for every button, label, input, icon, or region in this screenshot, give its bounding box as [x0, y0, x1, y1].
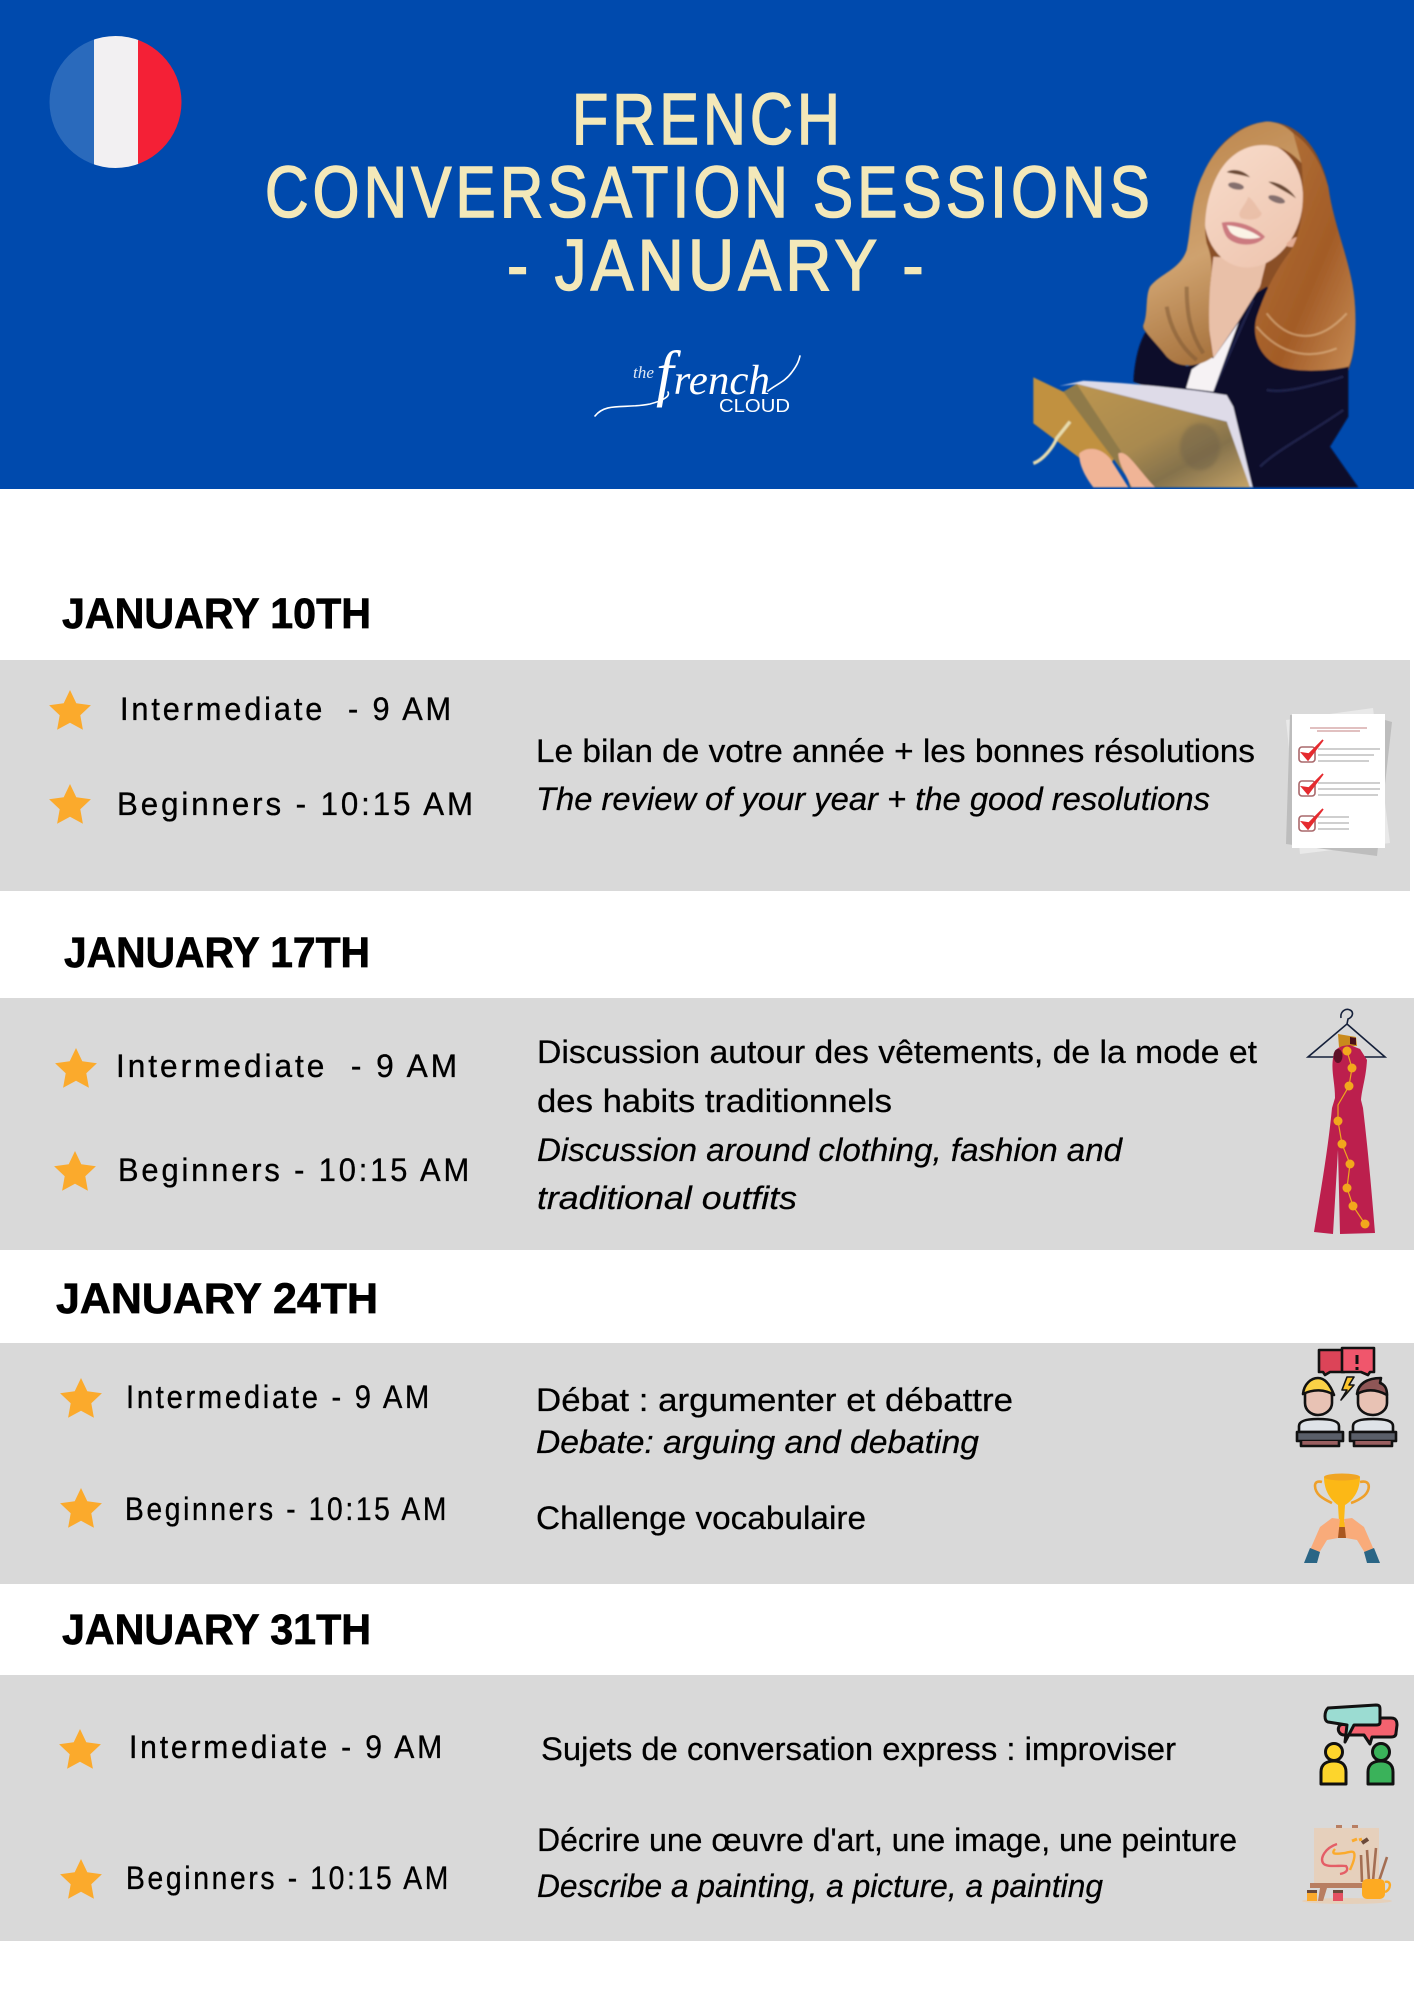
topic text: Discussion around clothing, fashion and	[537, 1132, 1123, 1168]
title: CONVERSATION SESSIONS	[265, 153, 1154, 233]
topic text: Discussion autour des vêtements, de la mode et	[537, 1034, 1257, 1070]
topic text	[536, 733, 1255, 817]
shirt	[1186, 322, 1239, 392]
icon: star	[59, 1729, 101, 1769]
notebook	[1033, 377, 1253, 487]
panel: January 10th session	[0, 660, 1410, 891]
hair back	[1143, 122, 1355, 370]
schedule: intermediate: Intermediate - 9 AM	[129, 1729, 445, 1765]
icon: star	[60, 1378, 102, 1418]
hair front left	[1143, 122, 1302, 365]
icon: two people talking	[1321, 1705, 1397, 1784]
schedule: intermediate: Intermediate - 9 AM	[126, 1379, 432, 1415]
icon: star	[55, 1048, 97, 1088]
date heading: January 10th: JANUARY 10TH	[62, 590, 371, 638]
topic text	[536, 1382, 1013, 1536]
icon: hands holding a trophy	[1304, 1474, 1380, 1563]
topic text: Describe a painting, a picture, a painting	[537, 1868, 1103, 1904]
schedule: intermediate: Intermediate - 9 AM	[120, 691, 454, 727]
title: - JANUARY -	[507, 226, 928, 306]
icon: star	[54, 1151, 96, 1191]
date heading: January 17th: JANUARY 17TH	[64, 929, 370, 977]
icon: two people debating	[1297, 1348, 1396, 1446]
topic text	[537, 1731, 1237, 1904]
logo: the french cloud: french	[656, 340, 770, 408]
schedule: beginners: Beginners - 10:15 AM	[118, 1152, 472, 1188]
topic text: Débat : argumenter et débattre	[536, 1382, 1013, 1418]
photo: smiling woman holding a gold notebook	[1033, 122, 1358, 487]
topic text: traditional outfits	[537, 1180, 797, 1216]
topic text: Debate: arguing and debating	[536, 1424, 979, 1460]
logo: the french cloud: CLOUD	[719, 396, 790, 416]
schedule: beginners: Beginners - 10:15 AM	[125, 1491, 449, 1527]
panel: January 17th session	[0, 998, 1414, 1250]
neck	[1207, 257, 1267, 358]
title	[265, 80, 1154, 306]
hand	[1079, 449, 1155, 487]
topic text: des habits traditionnels	[537, 1083, 892, 1119]
icon: star	[49, 690, 91, 730]
topic text: The review of your year + the good resolutions	[536, 781, 1210, 817]
topic text: Sujets de conversation express : improviser	[541, 1731, 1176, 1767]
title: FRENCH	[572, 80, 844, 160]
logo: the french cloud	[595, 340, 800, 416]
header banner	[0, 0, 1414, 489]
icon: star	[49, 784, 91, 824]
schedule: intermediate: Intermediate - 9 AM	[116, 1048, 460, 1084]
panel: January 31st session	[0, 1675, 1414, 1941]
topic text: Challenge vocabulaire	[536, 1500, 866, 1536]
icon: star	[60, 1859, 102, 1899]
logo: the french cloud: the	[633, 363, 654, 382]
topic text: Le bilan de votre année + les bonnes résolutions	[536, 733, 1255, 769]
topic text	[537, 1034, 1257, 1216]
jacket	[1133, 287, 1358, 487]
icon: checklist	[1286, 708, 1392, 856]
schedule: beginners: Beginners - 10:15 AM	[117, 786, 476, 822]
icon: easel with painting and brushes	[1302, 1825, 1392, 1904]
icon: red dress on a hanger	[1308, 1009, 1385, 1234]
schedule: beginners: Beginners - 10:15 AM	[126, 1860, 451, 1896]
date heading: January 24th: JANUARY 24TH	[56, 1275, 378, 1323]
topic text: Décrire une œuvre d'art, une image, une peinture	[537, 1822, 1237, 1858]
icon: star	[60, 1488, 102, 1528]
hair front right	[1255, 133, 1355, 371]
date heading: January 31st: JANUARY 31TH	[62, 1606, 371, 1654]
panel: January 24th session	[0, 1343, 1414, 1584]
face	[1191, 132, 1316, 278]
icon: French flag	[49, 36, 183, 168]
